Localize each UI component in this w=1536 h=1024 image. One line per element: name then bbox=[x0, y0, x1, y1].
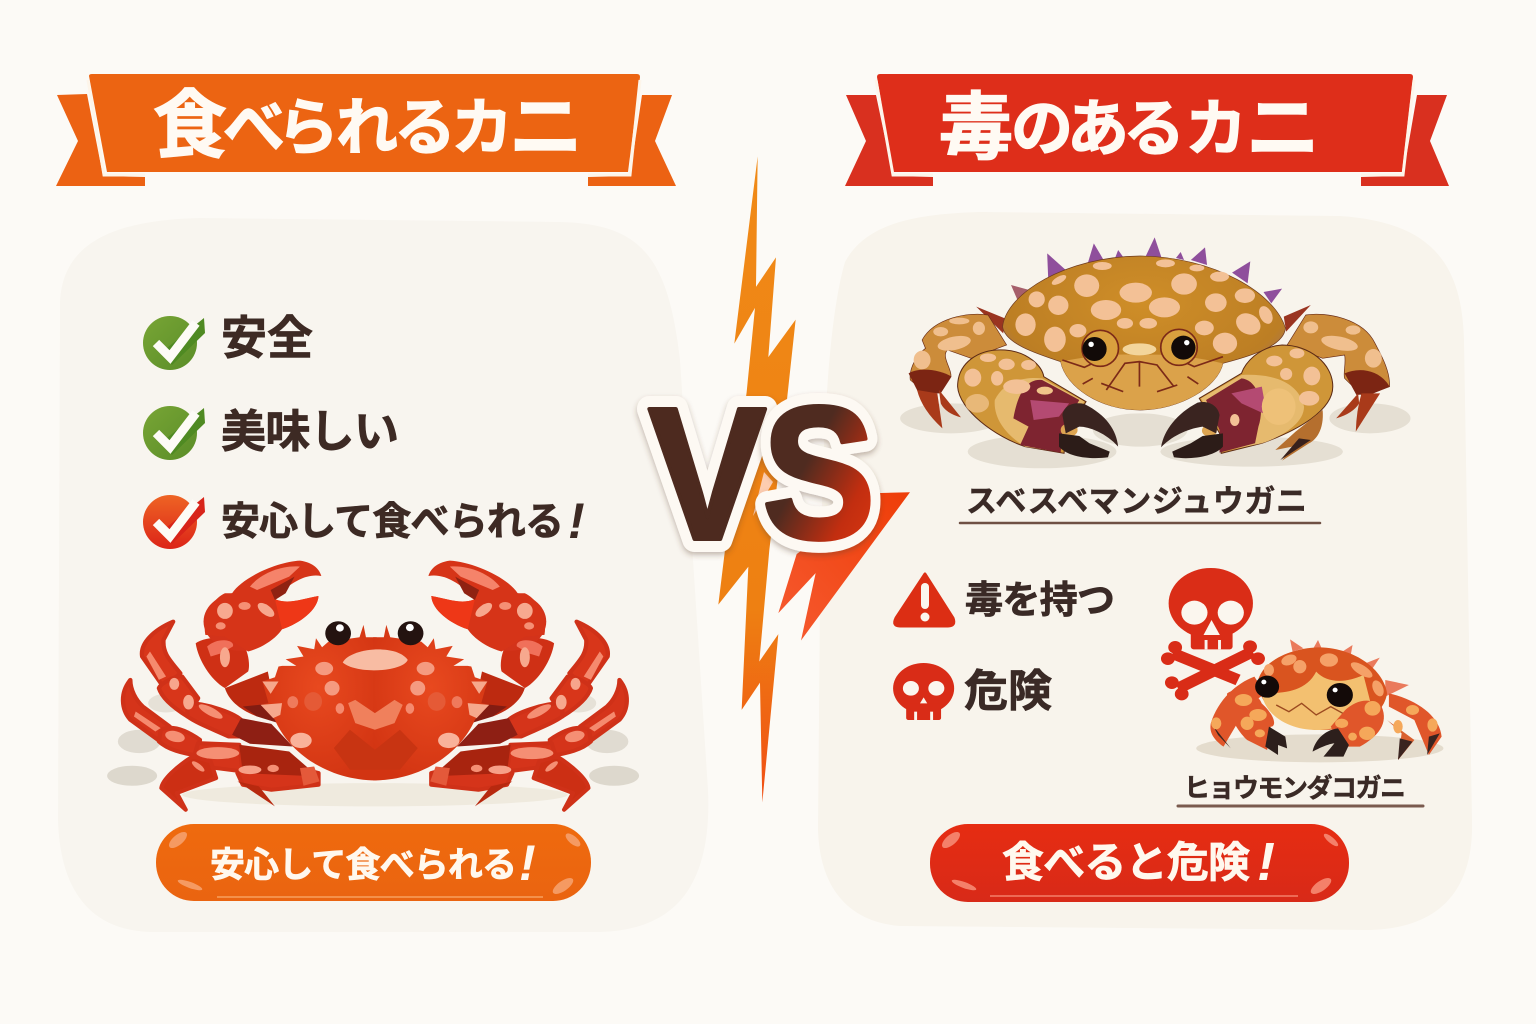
letter S: S bbox=[762, 368, 875, 579]
warning list bbox=[893, 574, 1115, 720]
spots bbox=[1015, 259, 1275, 354]
icon: skull and crossbones bbox=[1161, 568, 1265, 700]
label: blue-ringed crab name: ヒョウモンダコガニ bbox=[1184, 773, 1406, 803]
banner title: ニ bbox=[1246, 87, 1320, 170]
carapace bbox=[1003, 256, 1285, 410]
banner title: 食 bbox=[153, 84, 227, 167]
exclamation mark: ! bbox=[519, 835, 536, 891]
exclamation mark: ! bbox=[568, 493, 585, 549]
banner title: る bbox=[394, 94, 456, 163]
text: safe: 安全 bbox=[221, 312, 313, 364]
letter V: V bbox=[648, 368, 767, 579]
panel: edible crabs bbox=[58, 218, 708, 932]
banner title: カ bbox=[451, 94, 513, 163]
banner title: あ bbox=[1067, 95, 1129, 164]
illustration: smooth-shelled crab bbox=[900, 237, 1411, 468]
icon: warning triangle bbox=[895, 574, 954, 626]
list: edible merits bbox=[143, 312, 585, 549]
icon: skull bbox=[893, 663, 954, 720]
banner: poisonous crabs bbox=[845, 74, 1449, 186]
banner title: る bbox=[1123, 95, 1185, 164]
button: eat with peace of mind bbox=[156, 824, 591, 901]
right claw bbox=[1331, 701, 1384, 747]
shadow bbox=[1196, 734, 1443, 762]
banner title: ら bbox=[277, 94, 339, 163]
exclamation mark: ! bbox=[1257, 832, 1275, 892]
shadow bbox=[900, 403, 1411, 468]
lightning bolts bbox=[718, 156, 910, 803]
eyes bbox=[1123, 343, 1156, 355]
banner title: カ bbox=[1185, 95, 1247, 164]
left claw bbox=[1227, 690, 1274, 750]
button: dangerous to eat bbox=[930, 824, 1349, 902]
illustration: red edible crab bbox=[107, 561, 639, 810]
icon: green check bbox=[143, 406, 205, 460]
banner title: の bbox=[1011, 95, 1073, 164]
text: tasty: 美味しい bbox=[221, 406, 399, 457]
peach accent bbox=[753, 472, 773, 516]
letter S: S bbox=[762, 368, 875, 579]
banner title: ニ bbox=[509, 86, 583, 169]
right claw bbox=[1199, 345, 1333, 453]
panel: poisonous crabs bbox=[818, 212, 1472, 930]
icon: red check bbox=[143, 495, 205, 549]
spikes bbox=[1290, 639, 1409, 697]
legs bbox=[1210, 677, 1265, 747]
eyes bbox=[1255, 676, 1279, 698]
back legs bbox=[910, 314, 1007, 397]
banner title: べ bbox=[223, 94, 285, 163]
letter V: V bbox=[648, 368, 767, 579]
text: danger: 危険 bbox=[964, 667, 1052, 716]
text: eat with peace of mind: 安心して食べられる bbox=[221, 501, 564, 544]
button: dangerous to eat: 食べると危険 bbox=[1002, 839, 1250, 886]
banner title: れ bbox=[336, 94, 398, 163]
banner: edible crabs bbox=[56, 74, 676, 186]
VS badge bbox=[648, 368, 875, 579]
illustration: blue-ringed crab bbox=[1196, 639, 1443, 762]
button: eat with peace of mind: 安心して食べられる bbox=[210, 846, 517, 885]
label: smooth-shelled crab name: スベスベマンジュウガニ bbox=[966, 484, 1307, 519]
icon: green check bbox=[143, 316, 205, 370]
left claw bbox=[958, 350, 1086, 453]
text: has poison: 毒を持つ bbox=[965, 580, 1115, 622]
spikes bbox=[1011, 237, 1282, 303]
banner title: 毒 bbox=[939, 86, 1013, 169]
carapace bbox=[1258, 647, 1387, 730]
